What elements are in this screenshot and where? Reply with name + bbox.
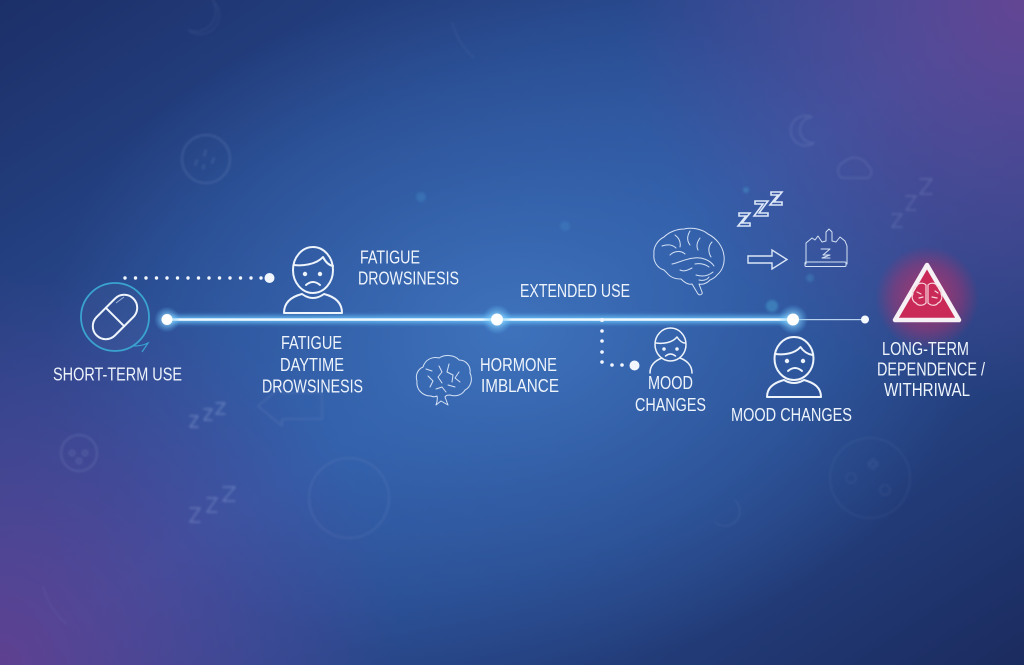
label: hormone imbalance: HORMONE <box>480 354 557 375</box>
label: fatigue drowsiness top: FATIGUE <box>360 246 420 268</box>
icon: sad person large <box>767 337 821 397</box>
label: mood changes small: MOOD <box>648 372 693 393</box>
label: fatigue daytime drowsiness: DAYTIME <box>280 354 344 375</box>
dotted connector: top left <box>123 273 274 283</box>
label: long-term dependence withdrawal: LONG-TERM <box>882 338 969 359</box>
icon: warning triangle with brain <box>875 246 979 350</box>
label: long-term dependence withdrawal <box>877 338 986 400</box>
label: fatigue daytime drowsiness <box>262 332 363 396</box>
label: long-term dependence withdrawal: DEPENDENCE / <box>877 358 986 380</box>
icon: bed with z <box>805 229 847 266</box>
timeline node: late <box>778 304 808 334</box>
label: mood changes small: CHANGES <box>635 394 706 415</box>
icon: zzz <box>738 192 782 226</box>
timeline node: end <box>861 316 869 324</box>
label: short-term use: SHORT-TERM USE <box>53 364 182 384</box>
label: fatigue drowsiness top <box>358 246 459 288</box>
timeline node: start <box>154 306 180 332</box>
icon: pill in circle <box>81 283 149 352</box>
arrow <box>748 250 787 269</box>
label: long-term dependence withdrawal: WITHRIWAL <box>884 379 970 400</box>
label: fatigue drowsiness top: DROWSINESIS <box>358 268 459 288</box>
dotted connector: mood changes <box>600 318 640 370</box>
icon: detailed brain <box>654 228 724 295</box>
icon: sad person 1 <box>284 247 342 313</box>
label: fatigue daytime drowsiness: FATIGUE <box>281 332 342 353</box>
timeline node: middle <box>482 304 512 334</box>
label: extended use: EXTENDED USE <box>520 280 630 301</box>
icon: sad person small <box>650 328 692 373</box>
label: fatigue daytime drowsiness: DROWSINESIS <box>262 376 363 396</box>
label: hormone imbalance <box>480 354 559 396</box>
label: mood changes small <box>635 372 706 415</box>
icon: brain outline hormone <box>416 356 471 405</box>
label: mood changes large: MOOD CHANGES <box>731 404 852 425</box>
timeline <box>154 304 869 334</box>
label: hormone imbalance: IMBLANCE <box>481 375 559 396</box>
